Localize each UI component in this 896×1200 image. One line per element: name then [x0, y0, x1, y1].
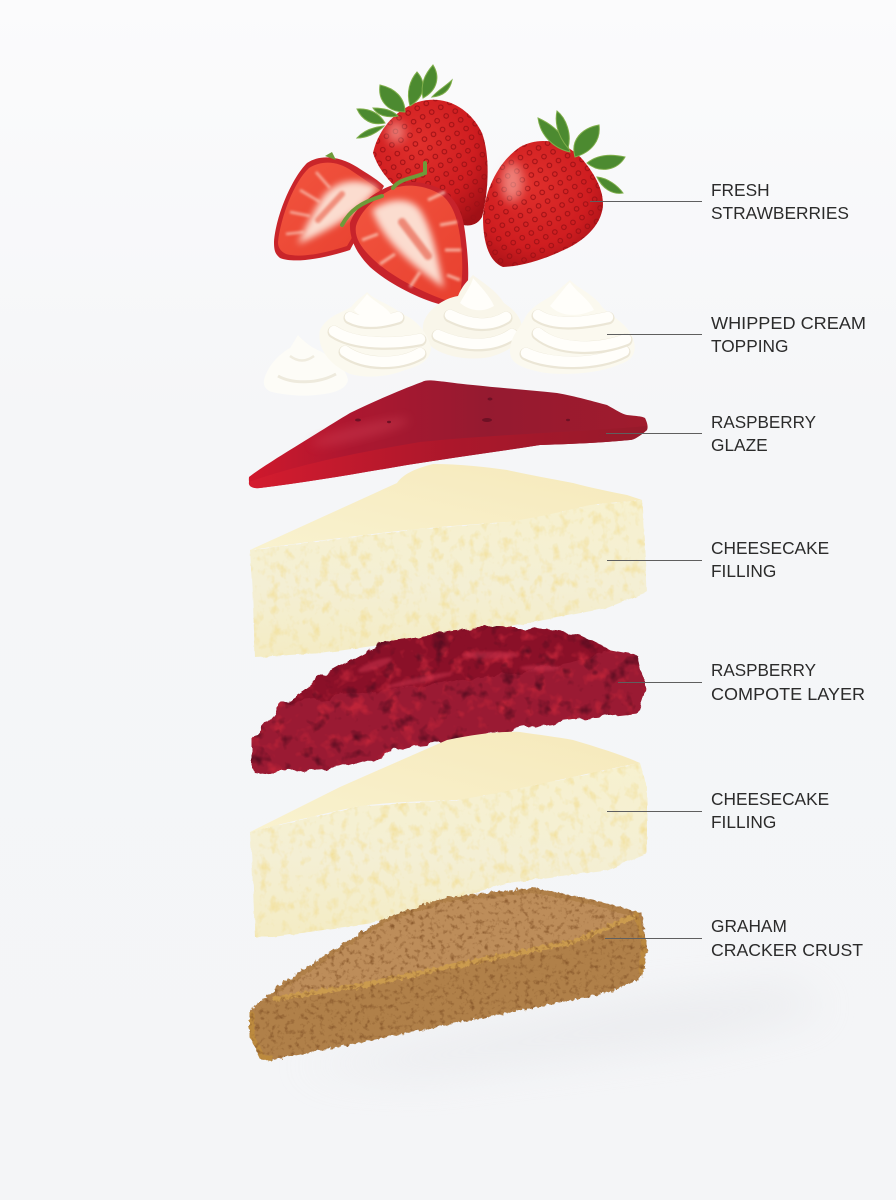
label: raspberry compote layer: [618, 660, 865, 704]
label: cheesecake filling lower: FILLING: [711, 812, 776, 832]
layer: upper cheesecake filling: [250, 464, 647, 657]
layer: lower cheesecake filling: [250, 732, 647, 937]
label: cheesecake filling upper: CHEESECAKE: [711, 538, 829, 558]
label: graham cracker crust: [605, 916, 863, 960]
label: raspberry glaze: [606, 412, 816, 455]
label: cheesecake filling lower: [607, 789, 829, 832]
label: raspberry glaze: RASPBERRY: [711, 412, 816, 432]
layer: whipped cream topping: [264, 275, 635, 396]
crust rim: [273, 916, 635, 999]
cake side: [250, 763, 647, 937]
label: graham cracker crust: GRAHAM: [711, 916, 787, 936]
compote gloss: [357, 652, 560, 690]
crust body: [250, 888, 647, 1060]
label: graham cracker crust: CRACKER CRUST: [711, 940, 863, 960]
icon: left halved strawberry: [274, 152, 384, 260]
icon: centre halved strawberry: [342, 163, 468, 306]
label: raspberry compote layer: COMPOTE LAYER: [711, 684, 865, 704]
layer: graham cracker crust: [250, 888, 647, 1060]
label: whipped cream topping: TOPPING: [711, 336, 788, 356]
label: fresh strawberries: [590, 180, 849, 223]
label: whipped cream topping: [607, 313, 866, 356]
crust top: [273, 893, 633, 997]
label: cheesecake filling upper: FILLING: [711, 561, 776, 581]
layer: raspberry glaze: [249, 380, 648, 488]
icon: top whole strawberry: [357, 65, 488, 225]
icon: left cream swirl: [319, 292, 431, 377]
label: raspberry glaze: GLAZE: [711, 435, 768, 455]
layer: raspberry compote: [252, 627, 645, 773]
label: fresh strawberries: STRAWBERRIES: [711, 203, 849, 223]
icon: strawberry stem: [342, 163, 425, 225]
icon: back cream swirl: [423, 275, 522, 359]
label: cheesecake filling upper: [607, 538, 829, 581]
label: fresh strawberries: FRESH: [711, 180, 770, 200]
cake top: [250, 464, 642, 550]
icon: small cream dollop: [264, 335, 348, 396]
label: cheesecake filling lower: CHEESECAKE: [711, 789, 829, 809]
glaze bubbles: [355, 398, 570, 423]
icon: right whole strawberry: [483, 111, 625, 267]
cake side: [250, 500, 647, 657]
label: whipped cream topping: WHIPPED CREAM: [711, 313, 866, 333]
label: raspberry compote layer: RASPBERRY: [711, 660, 816, 680]
cake top: [250, 732, 640, 832]
layer: fresh strawberries: [274, 65, 625, 306]
cast shadow: [290, 985, 830, 1075]
icon: right cream swirl: [510, 280, 635, 374]
